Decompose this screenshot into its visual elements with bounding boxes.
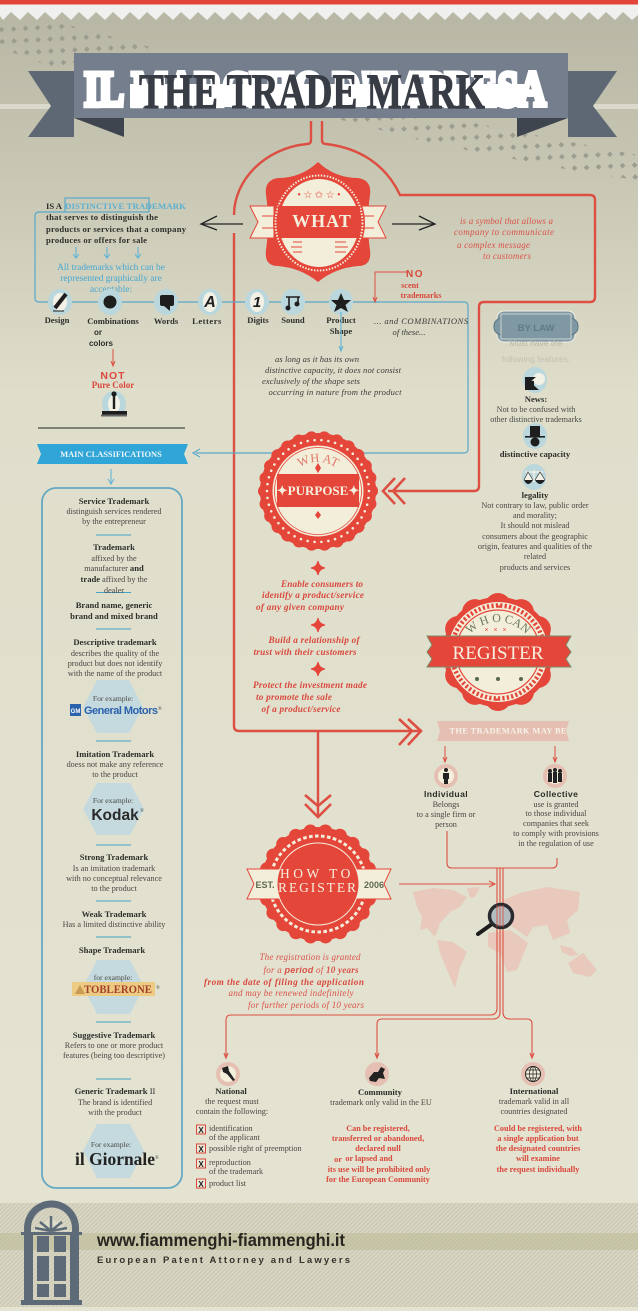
national checklist [196, 1124, 302, 1189]
national checklist: X [198, 1145, 204, 1154]
purpose list: Protect the investment made [253, 680, 367, 690]
example: general motors: ® [158, 706, 162, 712]
trademark: dealer [104, 586, 124, 595]
icon: sound [281, 289, 305, 315]
news text [490, 394, 582, 424]
imitation trademark: to the product [92, 770, 138, 779]
dot pattern left [0, 20, 180, 70]
brand name [70, 600, 158, 621]
service trademark: by the entrepreneur [82, 517, 146, 526]
badge: who can register [426, 593, 572, 711]
badge: how to register: 2006 [364, 880, 384, 890]
community text: Community [358, 1087, 403, 1097]
suggestive trademark: features (being too descriptive) [63, 1051, 165, 1060]
what label: WHAT [292, 211, 352, 231]
collective text: use is granted [533, 800, 579, 809]
example: kodak: For example: [93, 796, 133, 805]
community red text: declared null [355, 1144, 402, 1153]
red symbol description: to customers [483, 251, 531, 261]
community red text: Can be registered, [346, 1124, 410, 1133]
community red text: or [334, 1155, 342, 1164]
generic trademark: with the product [88, 1108, 143, 1117]
purpose list: identify a product/service [262, 590, 364, 600]
red symbol description: a complex message [457, 240, 530, 250]
individual text [417, 789, 476, 829]
news text: other distinctive trademarks [490, 415, 582, 424]
icon: europe [365, 1062, 389, 1086]
generic trademark [75, 1086, 156, 1117]
chevron arrow to register [399, 719, 421, 745]
purpose label: ✦PURPOSE✦ [277, 483, 359, 498]
example: toblerone: TOBLERONE [84, 982, 152, 996]
community red text: or lapsed and [345, 1154, 393, 1163]
trademark may be ribbon: THE TRADEMARK MAY BE [450, 726, 567, 736]
generic trademark: The brand is identified [78, 1098, 152, 1107]
legality text [478, 490, 592, 572]
est label: EST. [255, 880, 275, 890]
arrow left from what [201, 216, 243, 230]
arrows to individual and collective [443, 746, 557, 762]
trademark: affixed by the [91, 554, 137, 563]
icon labels: Design [45, 315, 70, 325]
icon labels: colors [89, 339, 114, 348]
example: toblerone [72, 960, 160, 1014]
panel: classifications [42, 488, 182, 1188]
star marker [311, 561, 325, 575]
international red text: the request individually [497, 1165, 580, 1174]
footer [0, 1201, 638, 1307]
who can curved label: W H O CAN [464, 614, 531, 634]
service trademark [66, 496, 162, 526]
main classifications ribbon [37, 444, 188, 464]
service trademark: Service Trademark [79, 496, 150, 506]
no scent trademarks: NO [406, 269, 424, 280]
national text: contain the following: [196, 1107, 268, 1116]
icon: letters: A [203, 294, 216, 311]
what curved label: WH AT [296, 454, 340, 466]
brand name: Brand name, generic [76, 600, 152, 610]
weak trademark: Weak Trademark [82, 909, 147, 919]
acceptable trademarks text: All trademarks which can be [57, 263, 165, 273]
international text: trademark valid in all [499, 1097, 570, 1106]
brand name: brand and mixed brand [70, 611, 158, 621]
national checklist: X [198, 1180, 204, 1189]
purpose list: of a product/service [262, 704, 340, 714]
international red text: Could be registered, with [494, 1124, 582, 1133]
international text [499, 1086, 570, 1116]
register label: REGISTER [452, 643, 544, 664]
icon: distinctive capacity hat [523, 423, 547, 449]
example: general motors: General Motors [84, 705, 158, 717]
red connector frame top [234, 121, 595, 815]
national text [196, 1086, 268, 1116]
must have text: Must have the [509, 338, 563, 348]
icon: news [523, 367, 547, 393]
registration period text: and may be renewed indefinitely [228, 988, 354, 998]
icon labels: ... and COMBINATIONS [374, 316, 469, 326]
purpose list: to promote the sale [256, 692, 332, 702]
definition text: IS A [46, 201, 63, 211]
example: general motors: GM [71, 709, 80, 715]
must have text [502, 338, 570, 364]
shape note [262, 354, 402, 397]
not pure color [92, 349, 134, 390]
badge: what purpose [258, 431, 378, 551]
panel: by law features [478, 311, 592, 572]
blue connector [35, 198, 468, 457]
icon labels: or [94, 328, 102, 337]
community red text: transferred or abandoned, [332, 1134, 424, 1143]
chevron arrow to how to register [305, 795, 331, 817]
national checklist: of the applicant [209, 1133, 261, 1142]
icon labels: of these... [393, 327, 425, 337]
not pure color: Pure Color [92, 380, 134, 390]
national checklist: possible right of preemption [209, 1144, 302, 1153]
icon labels: Letters [192, 316, 222, 326]
definition text: products or services that a company [46, 224, 187, 234]
example: general motors [70, 680, 162, 733]
example: il giornale: For example: [91, 1140, 131, 1149]
light streaks beside banner [0, 104, 638, 109]
trademark: manufacturer and [84, 563, 144, 573]
badge: how to register: REGISTER [278, 880, 356, 895]
international red text: the designated countries [496, 1144, 580, 1153]
legality text: related [524, 552, 546, 561]
shape note: occurring in nature from the product [268, 387, 402, 397]
national text: National [215, 1086, 247, 1096]
international text: International [510, 1086, 559, 1096]
strong trademark [66, 852, 162, 893]
international red text [494, 1124, 582, 1174]
no scent trademarks: trademarks [401, 291, 441, 300]
shape trademark: Shape Trademark [79, 945, 145, 955]
legality text: Not contrary to law, public order [481, 501, 589, 510]
star marker [311, 618, 325, 632]
small blue arrows [73, 247, 141, 258]
collective text: in the regulation of use [518, 839, 594, 848]
descriptive trademark: describes the quality of the [71, 649, 159, 658]
national text: the request must [205, 1097, 260, 1106]
registration period text: from the date of filing the application [204, 977, 364, 987]
international red text: a single application but [497, 1134, 579, 1143]
icon: scales [522, 464, 546, 490]
purpose list: Build a relationship of [268, 635, 360, 645]
icon labels: Combinations [87, 316, 139, 326]
icon: design [48, 289, 72, 315]
shape note: as long as it has its own [275, 354, 359, 364]
national checklist: X [198, 1126, 204, 1135]
weak trademark [63, 909, 166, 929]
community red text: its use will be prohibited only [328, 1165, 431, 1174]
national checklist: identification [209, 1124, 253, 1133]
arrow down to classification panel [108, 469, 114, 484]
icon labels: Digits [247, 315, 269, 325]
star marker [311, 662, 325, 676]
legality text: consumers about the geographic [482, 532, 588, 541]
descriptive trademark: with the name of the product [68, 669, 163, 678]
purpose list: of any given company [256, 602, 345, 612]
collective text [513, 789, 599, 848]
individual text: Individual [424, 789, 468, 799]
icon labels [45, 315, 469, 348]
trademark: trade affixed by the [81, 574, 148, 584]
acceptable trademarks text: acceptable: [90, 285, 132, 295]
icon: globe [521, 1062, 545, 1086]
legality text: products and services [500, 563, 570, 572]
legality text: It should not mislead [501, 521, 569, 530]
definition text [46, 201, 187, 245]
definition text: DISTINCTIVE TRADEMARK [65, 201, 186, 211]
strong trademark: Strong Trademark [80, 852, 148, 862]
suggestive trademark: Suggestive Trademark [73, 1030, 155, 1040]
icon: door [21, 1201, 82, 1305]
community text [330, 1087, 432, 1107]
example: kodak: Kodak [91, 807, 139, 824]
icon: magnifier [478, 904, 512, 934]
top zigzag edge [0, 0, 638, 20]
collective text: companies that seek [523, 819, 590, 828]
chevron arrow to purpose [383, 478, 405, 504]
example: general motors: For example: [93, 694, 133, 703]
collective text: to those individual [526, 809, 587, 818]
international red text: will examine [516, 1154, 560, 1163]
tagline: European Patent Attorney and Lawyers [97, 1255, 350, 1266]
news text: Not to be confused with [497, 405, 575, 414]
example: toblerone: for example: [94, 973, 132, 982]
website: www.fiammenghi-fiammenghi.it [96, 1230, 345, 1250]
weak trademark: Has a limited distinctive ability [63, 920, 166, 929]
icon labels: Words [154, 316, 179, 326]
strong trademark: Is an imitation trademark [73, 864, 156, 873]
icon: words [154, 289, 178, 315]
collective text: Collective [534, 789, 578, 799]
imitation trademark [67, 749, 164, 779]
suggestive trademark [63, 1030, 165, 1060]
world map [413, 887, 597, 988]
red symbol description: is a symbol that allows a [460, 216, 554, 226]
national checklist: X [198, 1160, 204, 1169]
no scent trademarks: scent [401, 281, 419, 290]
icon: collective [543, 764, 567, 788]
individual text: to a single firm or [417, 810, 476, 819]
by law plaque: BY LAW [518, 323, 554, 334]
imitation trademark: Imitation Trademark [76, 749, 154, 759]
badge: who can register: ××× [485, 626, 511, 634]
icon: stamp [101, 391, 127, 417]
trademark [81, 542, 148, 595]
legality text: and morality; [513, 511, 557, 520]
news text: News: [525, 394, 547, 404]
example: il giornale: il Giornale [75, 1149, 155, 1169]
icon: product shape [329, 289, 353, 315]
arrow to shape note [339, 312, 343, 351]
descriptive trademark: product but does not identify [68, 659, 163, 668]
badge: what [250, 162, 386, 282]
trademark may be ribbon [437, 721, 569, 741]
registration period text: for further periods of 10 years [248, 1000, 364, 1010]
by law plaque [494, 311, 578, 342]
red connector lines to registration types [224, 831, 557, 1058]
acceptable trademarks text [57, 263, 165, 295]
international text: countries designated [500, 1107, 568, 1116]
legality text: legality [522, 490, 549, 500]
icon: combinations [98, 289, 122, 315]
community text: trademark only valid in the EU [330, 1098, 432, 1107]
strong trademark: with no conceptual relevance [66, 874, 162, 883]
acceptable trademarks text: represented graphically are [60, 274, 162, 284]
registration period text: for a period of 10 years [264, 965, 359, 975]
community red text: for the European Community [326, 1175, 431, 1184]
descriptive trademark [68, 637, 163, 678]
badge: how to register [247, 827, 391, 941]
community red text [326, 1124, 431, 1184]
icon: individual [434, 764, 458, 788]
main classifications ribbon: MAIN CLASSIFICATIONS [60, 450, 162, 459]
trademark: Trademark [93, 542, 135, 552]
purpose list: trust with their customers [254, 647, 357, 657]
registration period text: The registration is granted [260, 952, 361, 962]
strong trademark: to the product [91, 884, 137, 893]
registration period text [204, 952, 364, 1010]
icon: italy [216, 1062, 240, 1086]
dot pattern right [334, 118, 638, 180]
example: il giornale: ® [155, 1155, 159, 1161]
distinctive capacity label: distinctive capacity [500, 449, 571, 459]
definition text: produces or offers for sale [46, 235, 147, 245]
title banner [28, 53, 617, 137]
shape note: exclusively of the shape sets [262, 376, 361, 386]
purpose list: Enable consumers to [280, 579, 363, 589]
definition text: that serves to distinguish the [46, 212, 158, 222]
suggestive trademark: Refers to one or more product [65, 1041, 164, 1050]
not pure color: NOT [100, 370, 126, 382]
example: kodak: ® [140, 808, 144, 814]
no scent trademarks [373, 269, 441, 302]
how to label: HOW TO [280, 866, 354, 881]
icon labels: Shape [330, 326, 352, 336]
descriptive trademark: Descriptive trademark [73, 637, 157, 647]
purpose list [253, 561, 367, 714]
national checklist: product list [209, 1179, 247, 1188]
icon labels: Product [326, 315, 356, 325]
generic trademark: Generic Trademark II [75, 1086, 156, 1096]
icon: letters [198, 289, 222, 315]
icon: digits: 1 [253, 294, 261, 311]
stars: • ☆ ✩ ☆ • [297, 190, 341, 201]
title dark text: THE TRADE MARK [139, 63, 485, 119]
arrow right from what [392, 216, 435, 230]
individual text: Belongs [433, 800, 459, 809]
individual text: person [435, 820, 457, 829]
collective text: to comply with provisions [513, 829, 599, 838]
service trademark: distinguish services rendered [66, 507, 162, 516]
national checklist: reproduction [209, 1158, 251, 1167]
example: il giornale [75, 1124, 159, 1178]
must have text: following features: [502, 354, 570, 364]
red symbol description [454, 216, 554, 261]
red symbol description: company to communicate [454, 227, 554, 237]
legality text: origin, features and qualities of the [478, 542, 592, 551]
national checklist: of the trademark [209, 1167, 264, 1176]
example: toblerone: ® [156, 985, 160, 991]
icon labels: Sound [281, 315, 305, 325]
imitation trademark: doess not make any reference [67, 760, 164, 769]
shape note: distinctive capacity, it does not consist [265, 365, 402, 375]
example: kodak [83, 783, 144, 835]
icon: digits [245, 289, 269, 315]
